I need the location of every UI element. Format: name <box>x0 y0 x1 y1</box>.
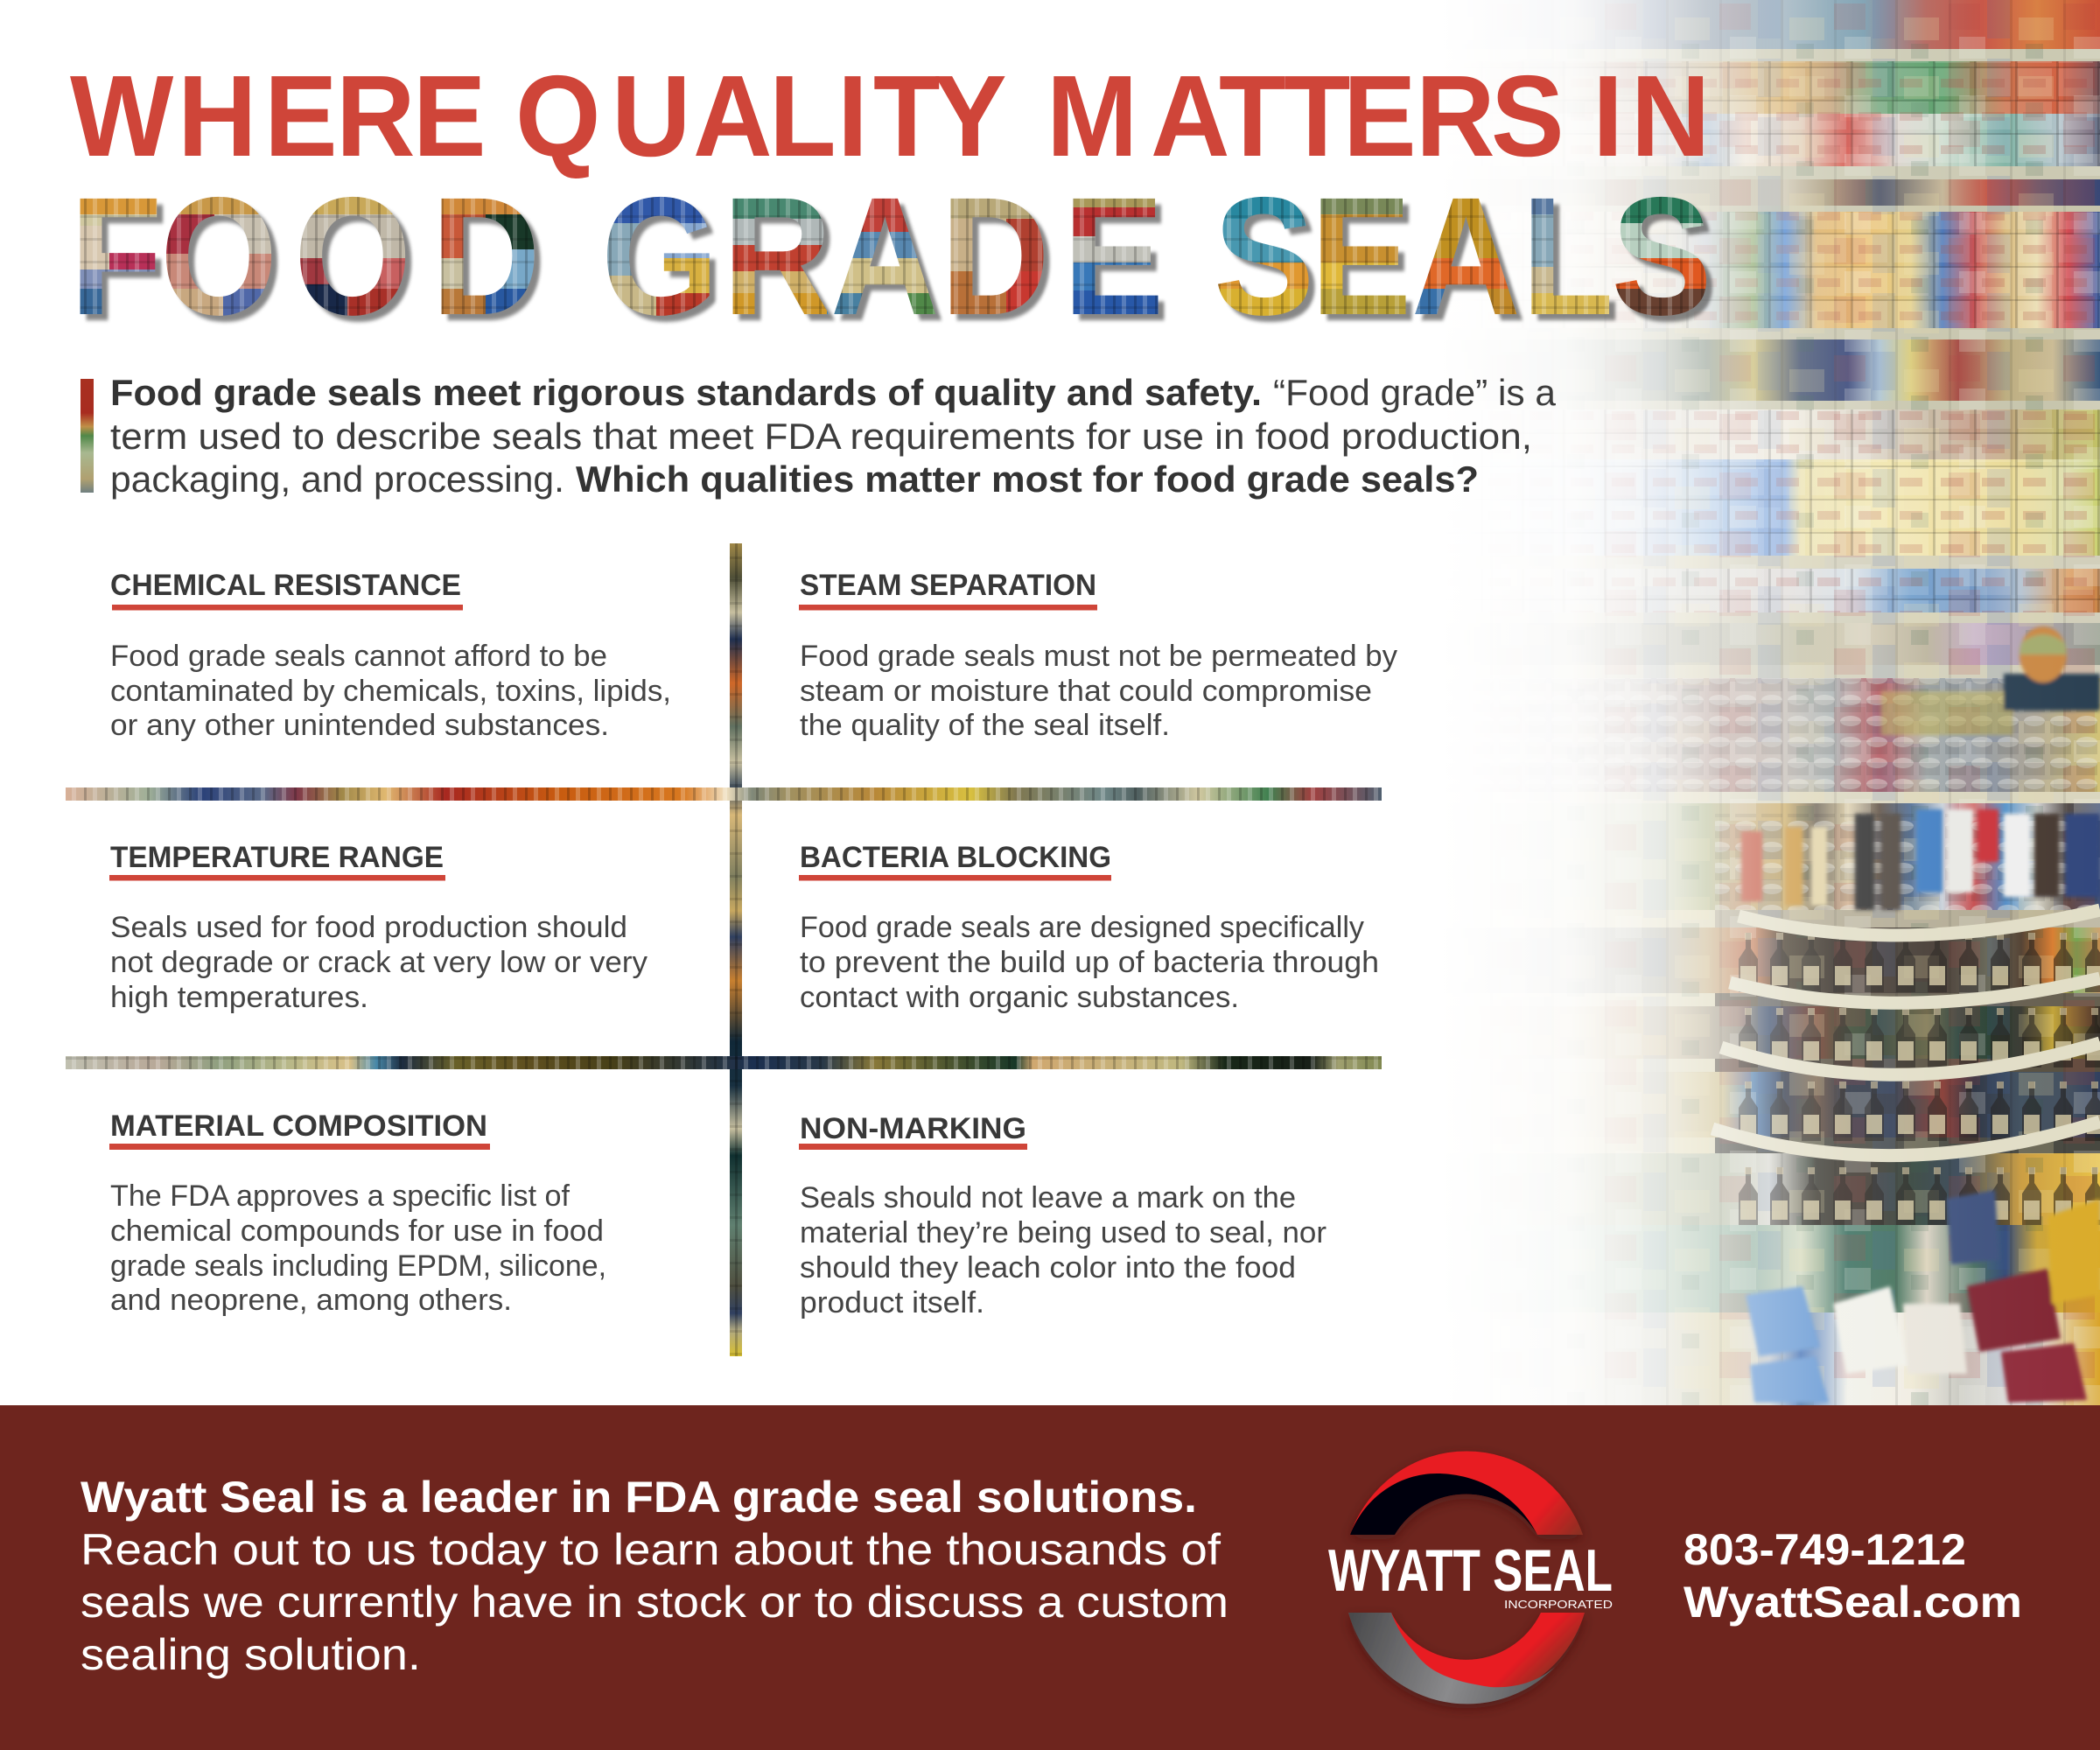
footer call to action text: sealing solution. <box>80 1630 421 1679</box>
panel: steam separation <box>799 569 1397 742</box>
contact details: WyattSeal.com <box>1684 1578 2022 1627</box>
panel: non-marking: should they leach color into the food <box>800 1251 1296 1284</box>
shelf products: shopper, boxes and displays <box>1741 626 2100 910</box>
panel: non-marking: material they’re being used to seal, nor <box>800 1216 1326 1250</box>
panel: non-marking: product itself. <box>800 1286 984 1320</box>
intro text block with accent bar: Food grade seals meet rigorous standards of quality and safety. <box>110 372 1262 413</box>
heading: Food Grade Seals filled with shelf imagery: FOOD GRADE SEALS <box>76 169 1718 356</box>
panel: material composition: MATERIAL COMPOSITION <box>110 1110 487 1143</box>
intro text block with accent bar: “Food grade” is a <box>1273 372 1557 413</box>
panel: chemical resistance: Food grade seals cannot afford to be <box>110 640 607 673</box>
panel: steam separation: Food grade seals must not be permeated by <box>800 640 1397 673</box>
intro text block with accent bar: term used to describe seals that meet FDA requirements for use in food production, <box>110 416 1532 457</box>
panel: chemical resistance: contaminated by chemicals, toxins, lipids, <box>110 675 671 708</box>
title line: Where Quality Matters In: WHERE QUALITY MATTERS IN <box>70 52 1710 181</box>
white fade overlay <box>1312 0 2100 1405</box>
panel: temperature range: high temperatures. <box>110 981 368 1014</box>
panel: temperature range <box>109 841 648 1014</box>
panel: material composition: grade seals including EPDM, silicone, <box>110 1250 606 1283</box>
footer band <box>0 1405 2100 1750</box>
logo: Wyatt Seal ring: INCORPORATED <box>1504 1598 1613 1611</box>
intro text block with accent bar: Which qualities matter most for food grade seals? <box>576 458 1479 500</box>
panel: material composition: and neoprene, among others. <box>110 1284 512 1317</box>
footer call to action text: seals we currently have in stock or to discuss a custom <box>80 1578 1228 1627</box>
logo: Wyatt Seal ring: WYATT SEAL <box>1328 1537 1613 1604</box>
panel: steam separation: the quality of the seal itself. <box>800 709 1170 742</box>
panel: chemical resistance: or any other unintended substances. <box>110 709 609 742</box>
panel: bacteria blocking <box>799 841 1379 1014</box>
panel: temperature range: TEMPERATURE RANGE <box>110 841 444 874</box>
pet food bags <box>1746 1190 2100 1403</box>
panel: chemical resistance <box>110 569 671 742</box>
panel: bacteria blocking: BACTERIA BLOCKING <box>800 841 1111 874</box>
panel: non-marking: Seals should not leave a mark on the <box>800 1181 1296 1214</box>
panel: material composition <box>109 1110 606 1317</box>
product textures by shelf <box>1312 61 2100 1225</box>
footer call to action text <box>80 1473 1228 1679</box>
panel: steam separation: STEAM SEPARATION <box>800 569 1096 602</box>
grid dividers made of shelf imagery <box>66 543 1382 1356</box>
contact details: 803-749-1212 <box>1684 1525 1966 1574</box>
panel: material composition: The FDA approves a specific list of <box>110 1180 570 1213</box>
panel: material composition: chemical compounds for use in food <box>110 1214 604 1248</box>
panel: temperature range: Seals used for food production should <box>110 911 627 944</box>
curved shelf edges <box>1712 910 2100 1156</box>
intro text block with accent bar <box>80 372 1557 500</box>
footer call to action text: Reach out to us today to learn about the thousands of <box>80 1525 1221 1574</box>
panel: bacteria blocking: Food grade seals are designed specifically <box>800 911 1364 944</box>
panel: bacteria blocking: to prevent the build up of bacteria through <box>800 946 1379 979</box>
logo: Wyatt Seal ring <box>1328 1451 1613 1704</box>
heading: Food Grade Seals filled with shelf imagery <box>80 196 1715 325</box>
panel: non-marking <box>799 1112 1326 1320</box>
panel: steam separation: steam or moisture that could compromise <box>800 675 1372 708</box>
panel: non-marking: NON-MARKING <box>800 1112 1026 1145</box>
footer call to action text: Wyatt Seal is a leader in FDA grade seal solutions. <box>80 1473 1197 1522</box>
intro text block with accent bar: packaging, and processing. <box>110 458 564 500</box>
panel: temperature range: not degrade or crack at very low or very <box>110 946 648 979</box>
photo: supermarket shelves fading into white <box>1312 0 2100 1405</box>
panel: chemical resistance: CHEMICAL RESISTANCE <box>110 569 461 602</box>
contact details <box>1684 1525 2022 1627</box>
panel: bacteria blocking: contact with organic substances. <box>800 981 1239 1014</box>
